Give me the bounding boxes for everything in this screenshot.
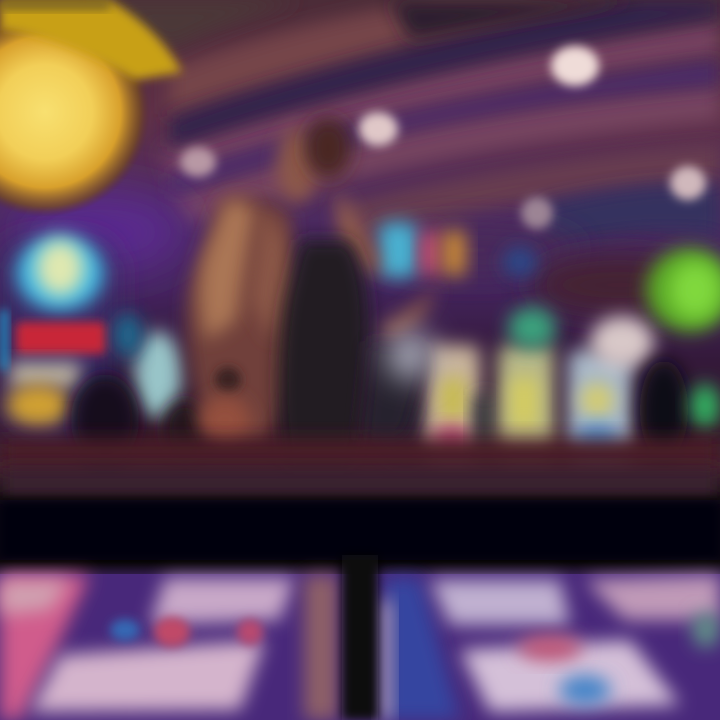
left slot machine xyxy=(0,235,115,440)
purple wall glow xyxy=(10,192,710,315)
chandelier xyxy=(0,0,182,225)
ceiling lights xyxy=(180,46,706,229)
black bar xyxy=(0,500,720,560)
bar pole xyxy=(342,555,378,720)
bar counter top xyxy=(0,438,720,498)
person xyxy=(187,118,440,465)
right slot machines xyxy=(371,307,688,466)
second slot machine xyxy=(71,313,207,466)
colourful held screen xyxy=(378,222,466,278)
carpet xyxy=(0,574,720,720)
ceiling stripes xyxy=(90,0,720,250)
green signs xyxy=(646,248,720,428)
